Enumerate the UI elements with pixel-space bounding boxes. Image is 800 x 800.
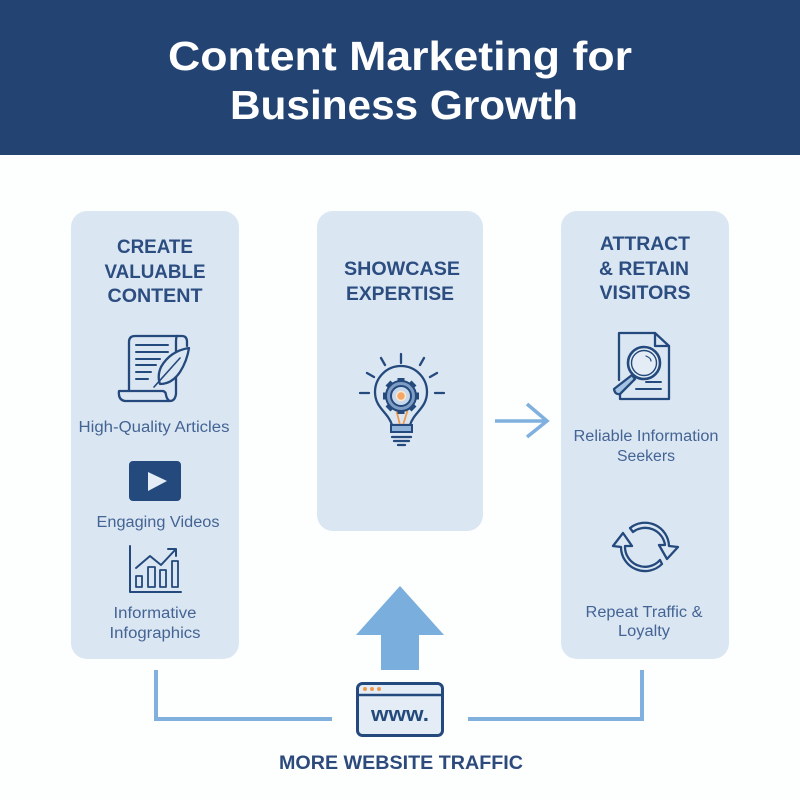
title [168, 33, 632, 128]
connector: right panel to website [468, 670, 642, 719]
heading: attract and retain visitors [599, 233, 690, 304]
icon: growth chart [130, 546, 181, 592]
heading: showcase expertise [344, 258, 460, 305]
arrow: showcase to attract [495, 404, 547, 437]
icon: video play button [129, 461, 181, 501]
heading: attract and retain visitors: & RETAIN [599, 258, 689, 280]
icon: light bulb with gear [360, 354, 444, 445]
icon: scroll and quill [119, 336, 189, 401]
title: Business Growth [230, 82, 578, 128]
label: repeat traffic and loyalty: Repeat Traffic & [586, 604, 703, 621]
heading: create valuable content: CREATE [117, 236, 193, 258]
icon: website browser window: www. [370, 704, 429, 726]
label: informative infographics: Informative [114, 605, 196, 622]
label: high-quality articles: High-Quality Articles [78, 419, 230, 436]
label: informative infographics [110, 605, 201, 642]
icon: repeat cycle arrows [613, 523, 678, 571]
title: Content Marketing for [168, 33, 632, 79]
panel: attract and retain visitors [561, 211, 729, 659]
label: reliable information seekers [574, 428, 718, 465]
heading: create valuable content: CONTENT [108, 285, 203, 307]
label: repeat traffic and loyalty: Loyalty [618, 623, 670, 640]
heading: create valuable content: VALUABLE [104, 261, 206, 283]
heading: showcase expertise: SHOWCASE [344, 258, 460, 280]
heading: attract and retain visitors: ATTRACT [600, 233, 690, 255]
icon: website browser window [358, 684, 442, 736]
label: engaging videos: Engaging Videos [96, 514, 220, 531]
arrow: traffic upward [356, 586, 444, 670]
connector: left panel to website [156, 670, 332, 719]
heading: showcase expertise: EXPERTISE [346, 283, 454, 305]
caption: more website traffic: MORE WEBSITE TRAFFIC [279, 752, 523, 774]
label: informative infographics: Infographics [110, 625, 201, 642]
heading: create valuable content [104, 236, 206, 307]
icon: document with magnifier [614, 333, 669, 399]
heading: attract and retain visitors: VISITORS [600, 282, 690, 304]
label: reliable information seekers: Seekers [617, 448, 675, 465]
panel: create valuable content [71, 211, 239, 659]
label: reliable information seekers: Reliable Information [574, 428, 718, 445]
panel: showcase expertise [317, 211, 483, 531]
label: repeat traffic and loyalty [586, 604, 703, 640]
title banner [0, 0, 800, 155]
